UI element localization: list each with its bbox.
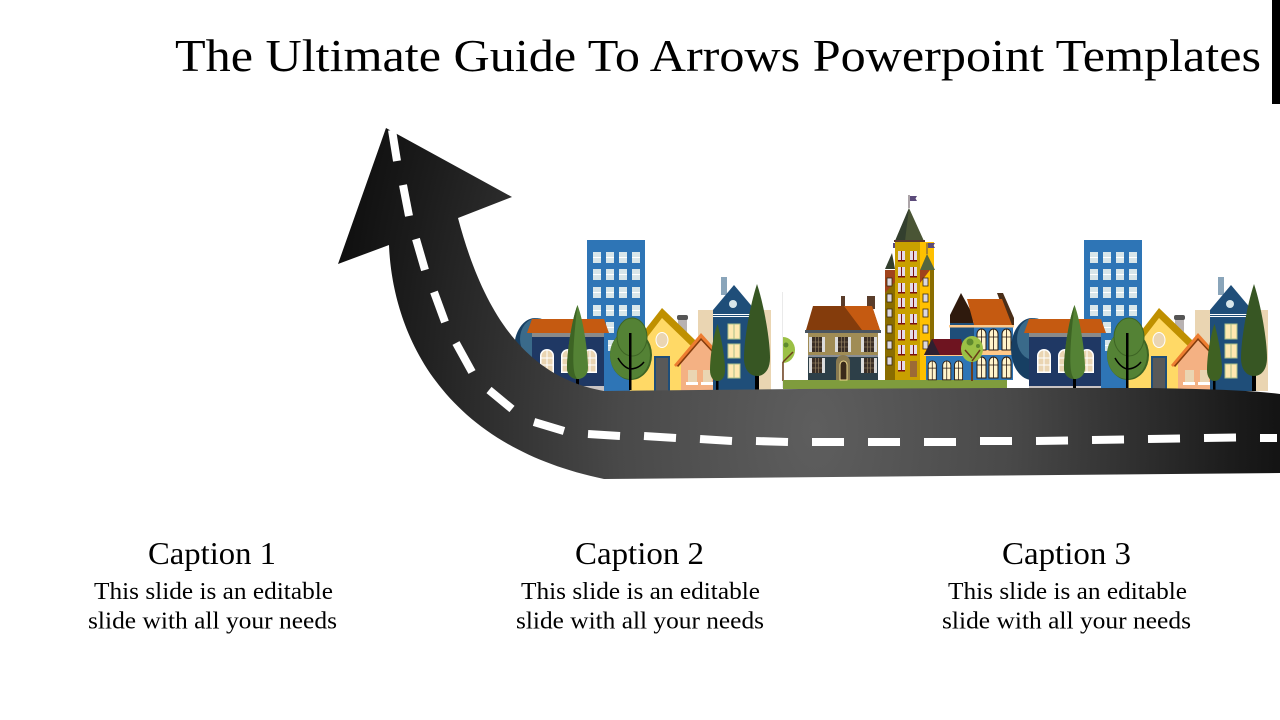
caption 3 body: slide with all your needs [942,608,1191,634]
caption 2 body: slide with all your needs [516,608,764,634]
lane markings [392,130,1277,442]
two-storey blue house [949,293,1014,380]
city cluster: centre [782,195,1014,389]
navy house [527,319,609,391]
caption 3 heading: Caption 3 [1002,535,1131,571]
tall blue house [713,277,755,391]
cypress tree [567,305,588,390]
caption 3 body [942,579,1191,634]
manor house [805,296,881,380]
blue tower block [587,240,645,363]
caption block 1 [88,535,337,634]
tan backdrop building [698,310,771,391]
corner accent bar [1272,0,1280,104]
small blue house [924,339,965,380]
yellow house [630,308,695,391]
caption 2 heading: Caption 2 [575,535,704,571]
tall dark tree [744,284,770,391]
peach cottage [674,333,727,391]
city cluster: right [1011,240,1268,391]
chimney [677,315,688,342]
caption block 3 [942,535,1191,634]
lime tree [961,336,983,381]
lime tree at edge [783,337,795,381]
caption 3 body: This slide is an editable [948,579,1187,605]
round blue bush [514,318,556,380]
blue annex [604,333,630,391]
city cluster: left [514,240,771,391]
divider line [782,292,783,388]
caption 2 body: This slide is an editable [521,579,760,605]
caption block 2 [516,535,764,634]
grass strip [783,380,1007,389]
small dark tree [710,324,725,391]
road surface [338,128,1280,479]
caption 1 body [88,579,337,634]
castle tower [885,195,935,380]
road arrow [338,128,1280,479]
caption 1 body: This slide is an editable [94,579,333,605]
caption 2 body [516,579,764,634]
title: The Ultimate Guide To Arrows Powerpoint Templates [175,30,1261,81]
caption 1 heading: Caption 1 [148,535,276,571]
caption 1 body: slide with all your needs [88,608,337,634]
round tree [610,318,652,390]
